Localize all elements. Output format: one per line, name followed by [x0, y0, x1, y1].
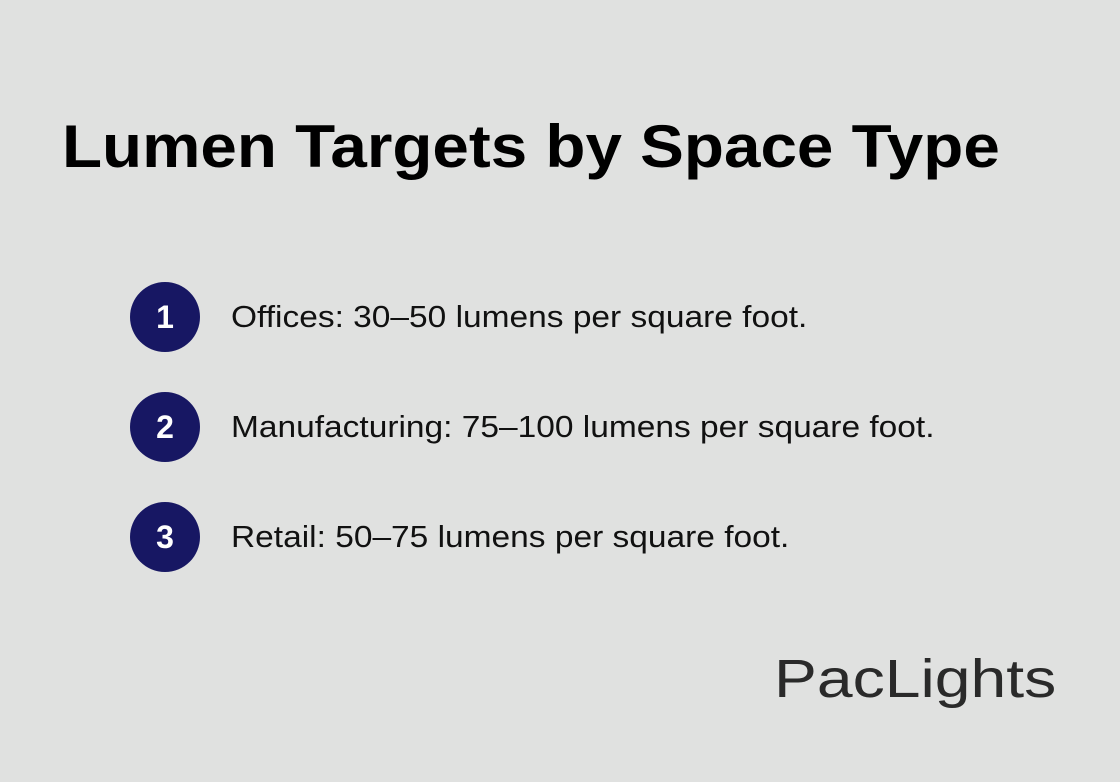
number badge 2: 2 — [156, 409, 174, 445]
number badge 3 — [130, 502, 200, 572]
item 3: Retail: 50–75 lumens per square foot. — [231, 519, 789, 554]
number badge 2 — [130, 392, 200, 462]
item 3 — [130, 502, 789, 572]
item 2 — [130, 392, 935, 462]
number badge 3: 3 — [156, 519, 174, 555]
number badge 1 — [130, 282, 200, 352]
number badge 1: 1 — [156, 299, 174, 335]
item 1 — [130, 282, 807, 352]
logo: PacLights — [774, 649, 1056, 709]
title: Lumen Targets by Space Type — [62, 113, 1000, 180]
item 2: Manufacturing: 75–100 lumens per square foot. — [231, 409, 935, 444]
item 1: Offices: 30–50 lumens per square foot. — [231, 299, 807, 334]
